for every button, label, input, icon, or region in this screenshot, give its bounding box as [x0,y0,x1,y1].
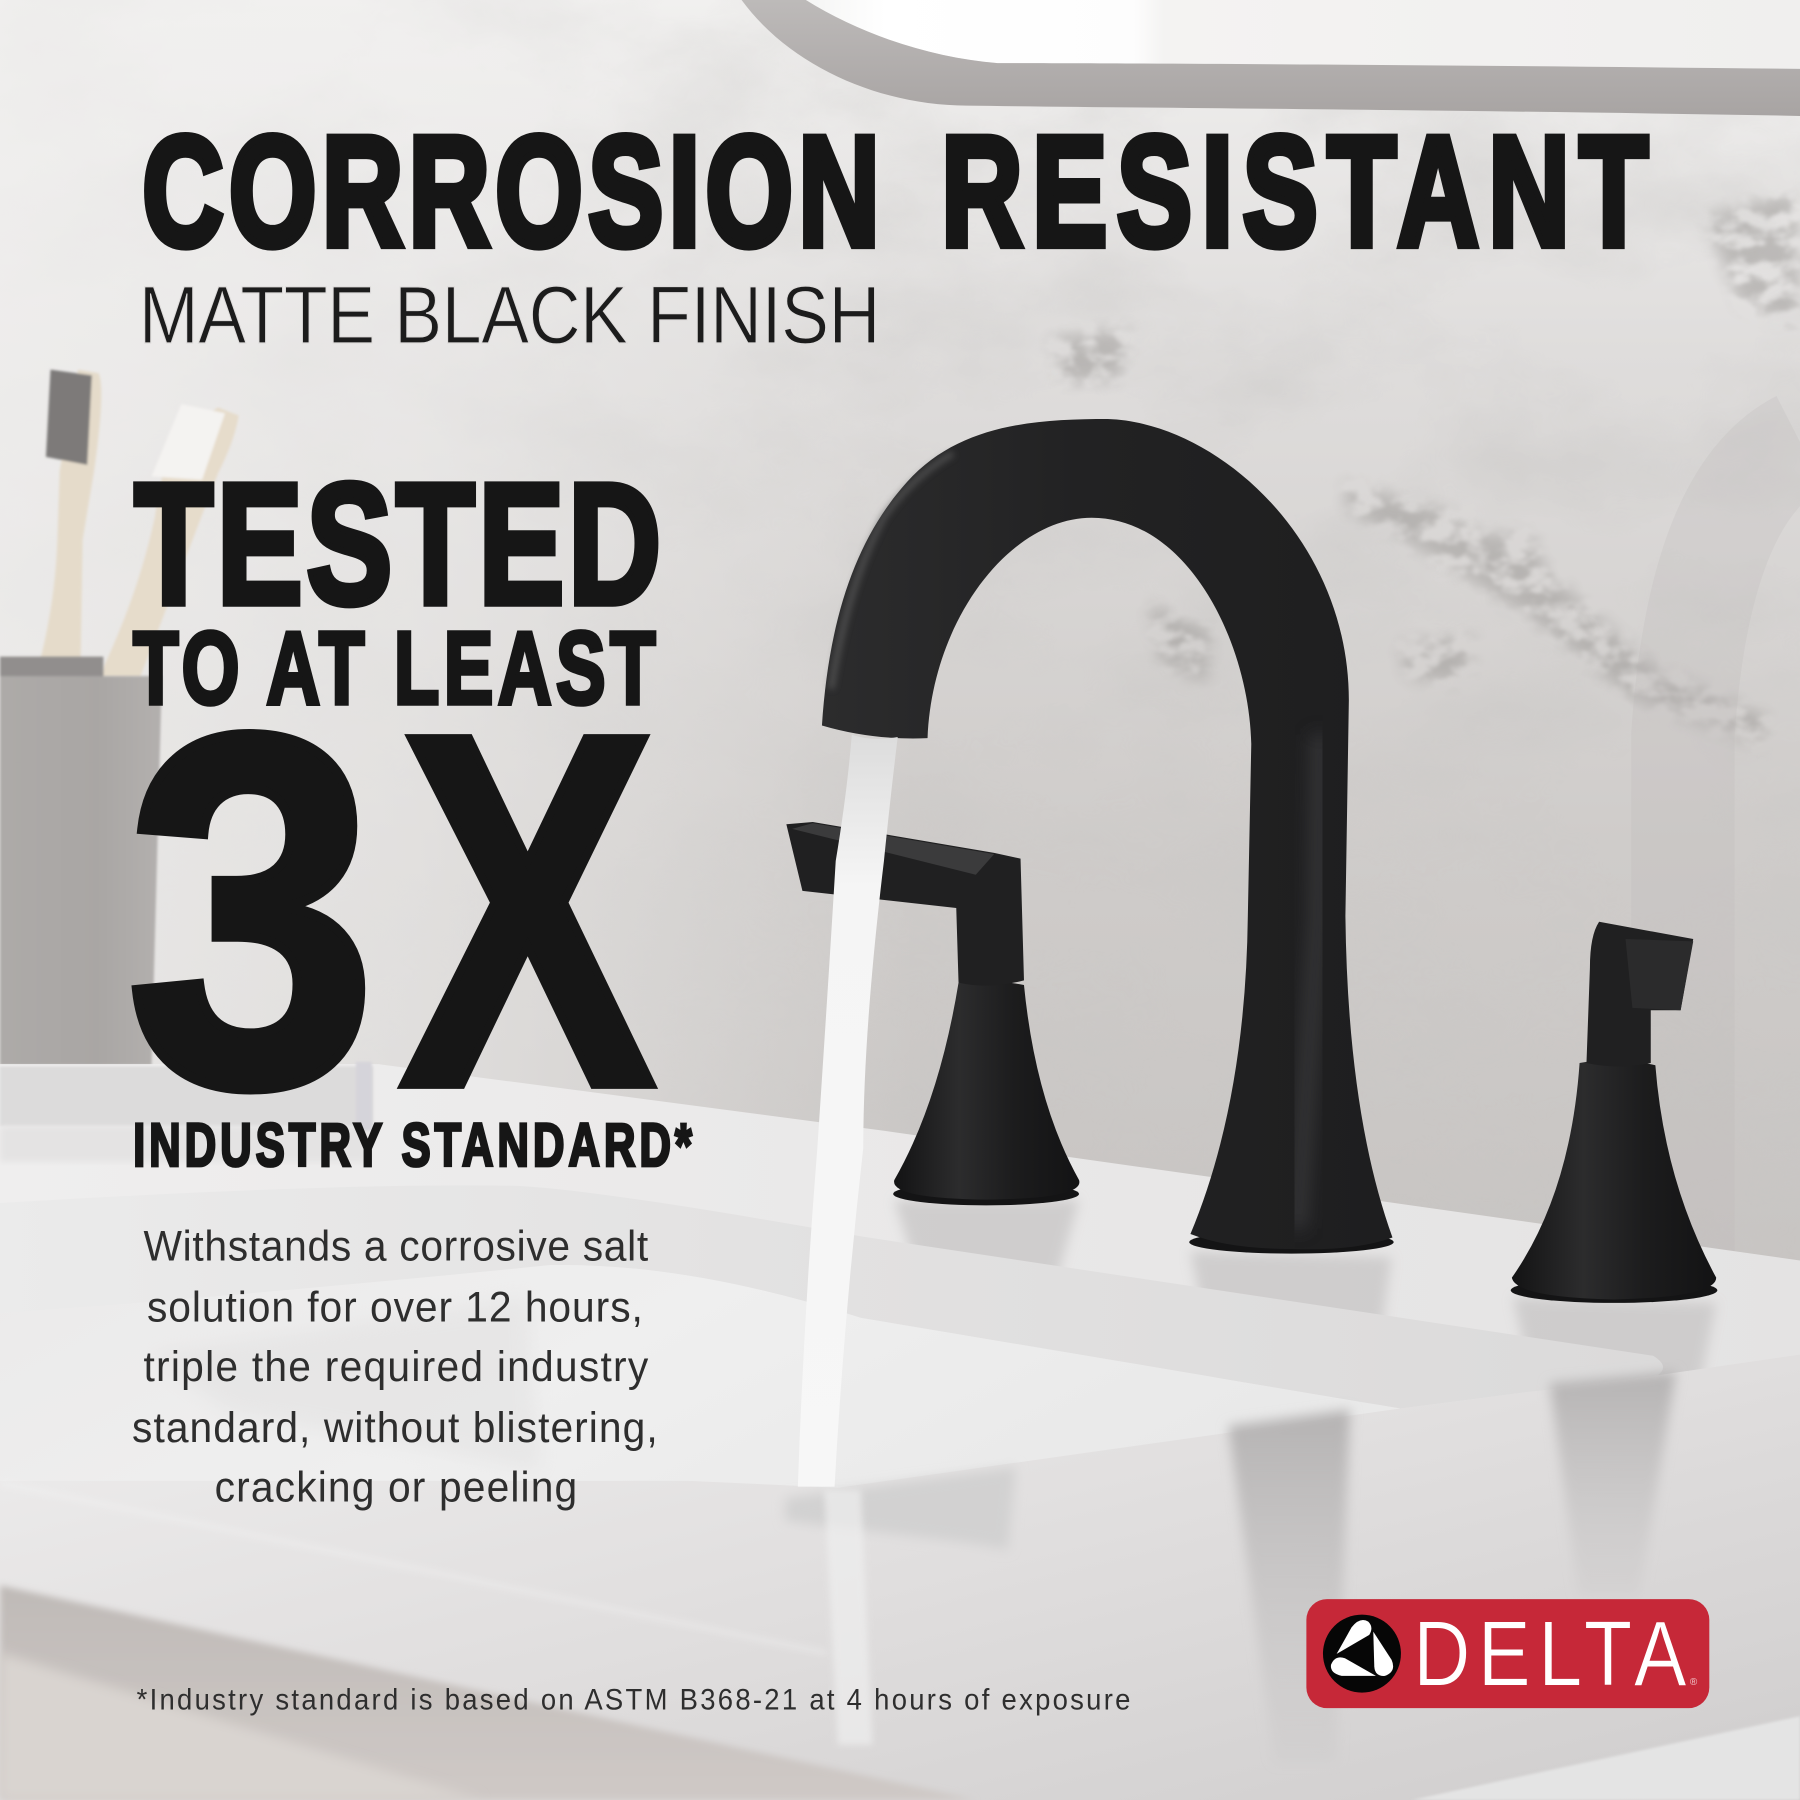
headline: tested: TESTED [134,448,661,641]
water reflection [824,1490,872,1745]
counter top [0,1062,1800,1800]
body text: triple the required industry [143,1342,648,1390]
Delta logo [1306,1599,1709,1708]
faucet reflections on counter top [894,1200,1716,1492]
sink rim [0,1185,1663,1409]
registered mark: ® [1690,1677,1698,1688]
cup [0,657,162,1065]
faucet: right handle [1511,922,1717,1303]
water stream [798,735,898,1487]
toothbrushes [36,370,239,677]
headline: industry standard: INDUSTRY STANDARD* [133,1112,692,1180]
body text: standard, without blistering, [132,1403,658,1451]
icon: Delta triangle mark [1323,1615,1401,1693]
background: marble wall [0,0,1800,1297]
toothbrush: white bristles [99,404,239,677]
title: CORROSION [142,104,880,278]
title: RESISTANT [941,104,1648,278]
headline: 3X: 3 [126,631,377,1190]
sink basin inner shadow [149,1297,540,1469]
faucet [786,419,1717,1303]
toothbrush: dark bristles [36,370,101,677]
headline: to at least: TO AT LEAST [133,612,656,727]
headline: 3X: X [401,632,656,1191]
body text: solution for over 12 hours, [147,1283,643,1330]
faucet: left handle [786,822,1079,1205]
body text: Withstands a corrosive salt [143,1222,649,1270]
body text [132,1222,658,1511]
body text: cracking or peeling [215,1463,577,1511]
faucet reflections on counter front [785,1372,1676,1762]
headline: 3X [126,631,656,1191]
wordmark: DELTA [1413,1603,1687,1706]
mirror with grey frame [742,0,1800,116]
counter front [0,1355,1800,1800]
title [142,104,1648,278]
faucet: spout [822,419,1394,1254]
sink basin [0,1265,1401,1488]
subtitle: MATTE BLACK FINISH [139,271,880,361]
footnote: *Industry standard is based on ASTM B368-21 at 4 hours of exposure [137,1683,1130,1717]
